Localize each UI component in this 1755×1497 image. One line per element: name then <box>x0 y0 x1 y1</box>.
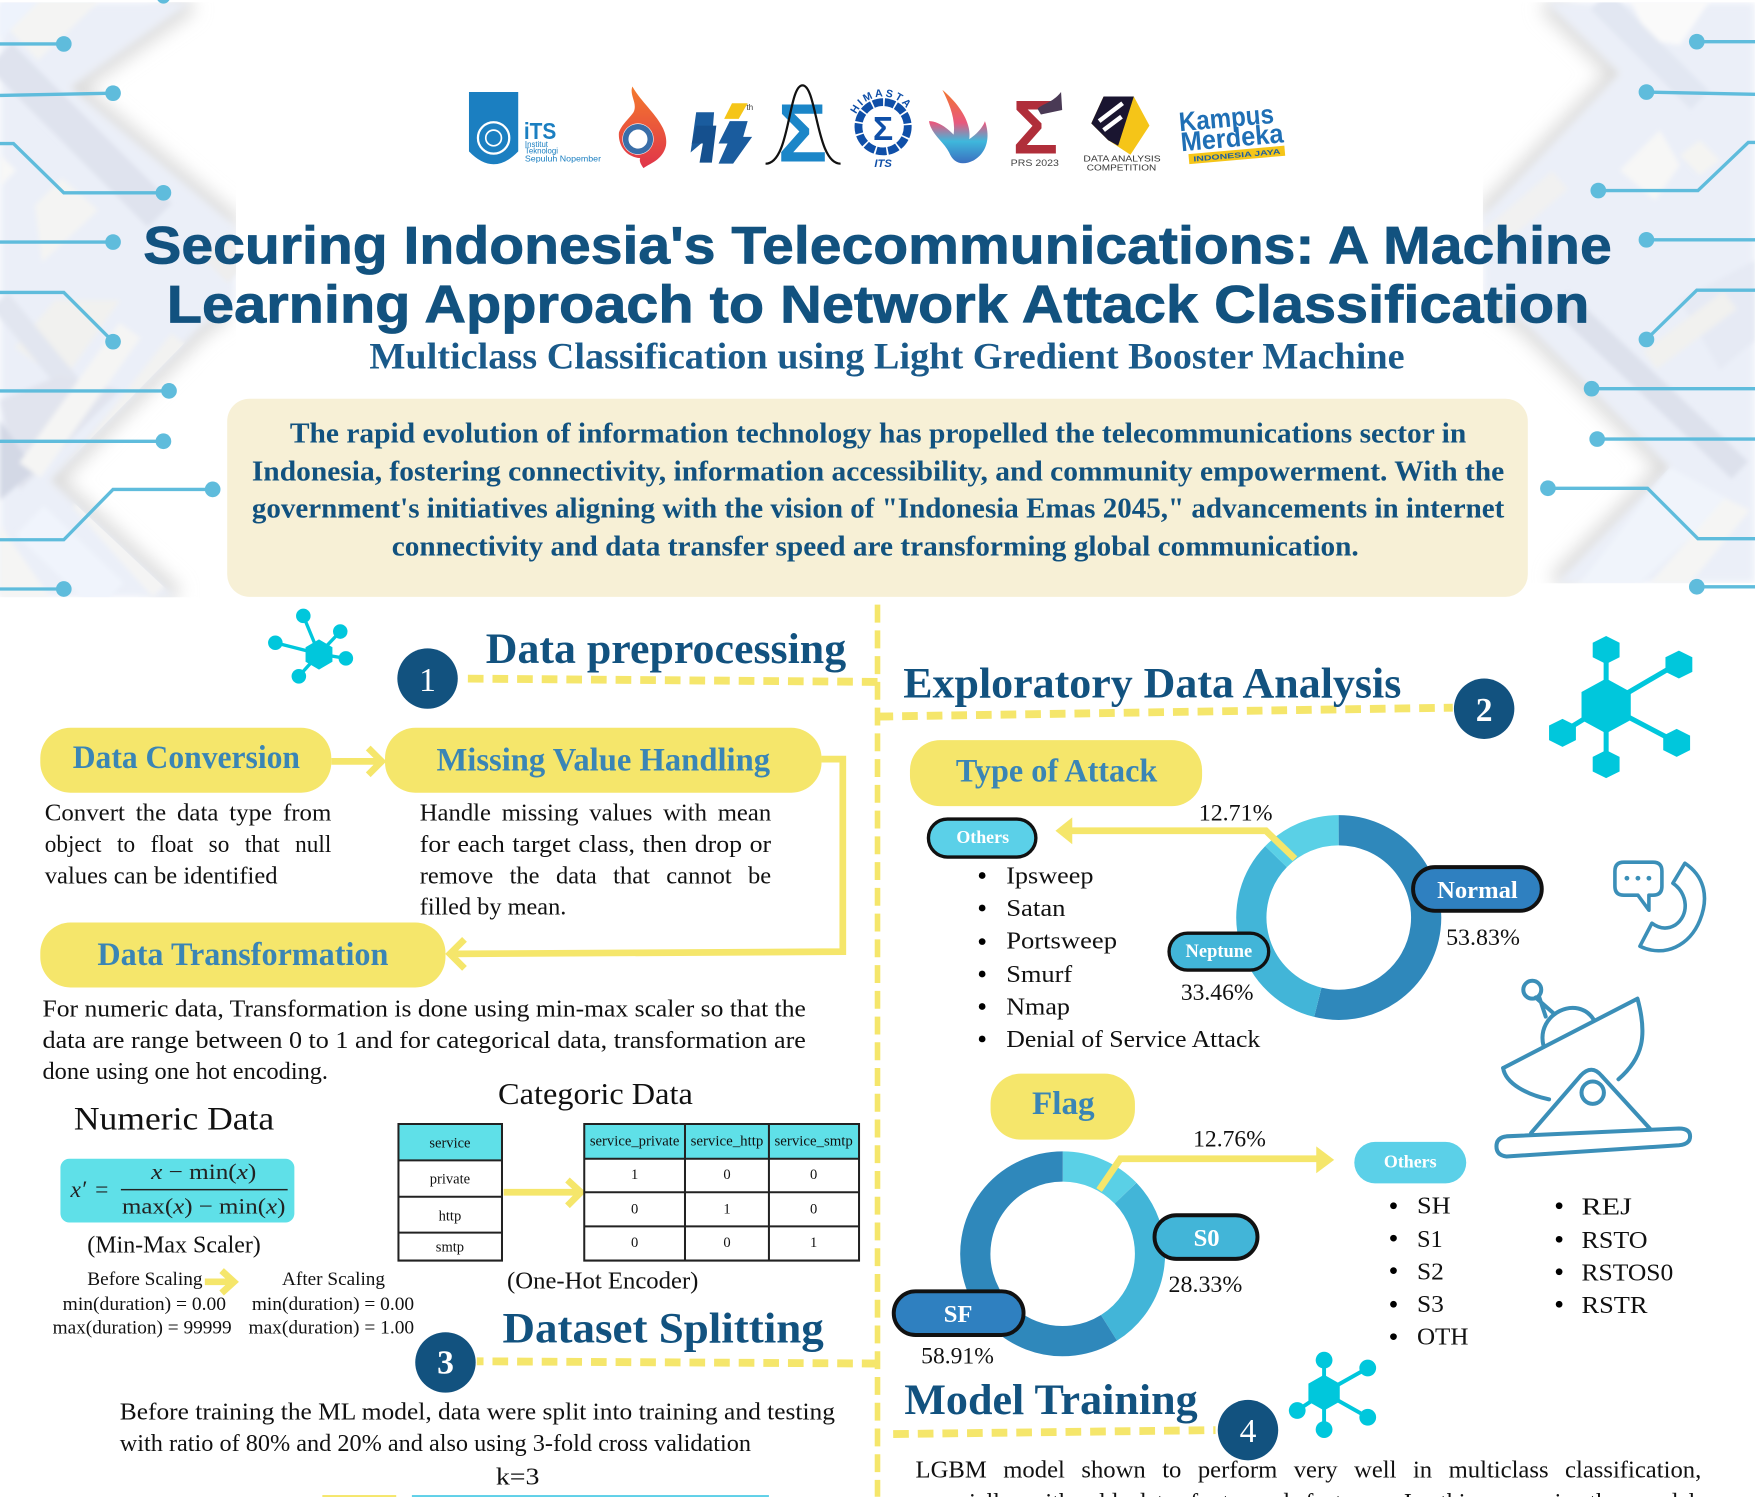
label: others attack: Others <box>956 827 1009 847</box>
value: others 12.71: 12.71% <box>1199 801 1273 827</box>
text: data transformation: data are range between 0 to 1 and for categorical data, transformation are <box>43 1028 806 1054</box>
list: attack types: Portsweep <box>1006 927 1117 954</box>
text: data transformation <box>43 997 806 1085</box>
intro panel <box>227 399 1528 597</box>
background: left chevron pattern <box>0 0 240 597</box>
list: flags column 2 <box>1556 1194 1673 1319</box>
arrow: before to after scaling <box>205 1271 234 1293</box>
arrow: conversion to missing value <box>331 748 382 775</box>
pill: missing value handling <box>385 728 822 793</box>
label: others flag <box>1354 1142 1466 1183</box>
value: SF 58.91: 58.91% <box>921 1344 994 1370</box>
icon: phone with speech bubble <box>1615 862 1704 951</box>
logo: ITS <box>469 92 601 164</box>
text: data conversion: Convert the data type from <box>45 801 332 827</box>
k-fold bars <box>322 1495 769 1497</box>
intro panel: The rapid evolution of information technology has propelled the telecommunications sector in <box>290 418 1466 449</box>
table: one-hot: service_smtp <box>775 1133 853 1149</box>
formula: min-max scaler: x′ <box>70 1177 87 1203</box>
text: dataset splitting: with ratio of 80% and 20% and also using 3-fold cross validation <box>120 1431 751 1457</box>
logo row <box>468 84 1286 179</box>
scaling example: min(duration) = 0.00 <box>63 1294 226 1315</box>
table: one-hot: 0 <box>810 1167 817 1183</box>
value: S0 28.33: 28.33% <box>1169 1272 1242 1298</box>
list: flags column 2: RSTO <box>1582 1227 1648 1254</box>
label: others attack <box>928 819 1036 857</box>
text: missing value handling <box>420 801 771 921</box>
label: normal <box>1413 867 1542 911</box>
text: data transformation: For numeric data, Transformation is done using min-max scaler so that the <box>43 997 806 1023</box>
scaling example: max(duration) = 1.00 <box>248 1317 414 1338</box>
pill: missing value handling: Missing Value Handling <box>437 742 770 778</box>
text: dataset splitting: Before training the ML model, data were split into training and testing <box>120 1399 835 1425</box>
table: service: smtp <box>436 1240 464 1256</box>
heading: section 2 exploratory data analysis <box>878 660 1514 739</box>
table: one-hot: 0 <box>810 1202 817 1218</box>
arrow: service to one-hot <box>504 1180 581 1206</box>
icon: satellite dish <box>1496 981 1690 1156</box>
scaling example: After Scaling <box>282 1269 386 1290</box>
heading: section 1 data preprocessing <box>397 625 878 709</box>
formula: min-max scaler: x − min( x) <box>150 1159 256 1184</box>
label: neptune <box>1169 933 1269 970</box>
logo: ITS: Sepuluh Nopember <box>525 154 601 163</box>
text: missing value handling: for each target class, then drop or <box>420 832 771 858</box>
heading: section 4 model training: 4 <box>1240 1413 1257 1450</box>
table: one-hot: service_private <box>590 1133 679 1149</box>
pill: flag: Flag <box>1032 1086 1095 1122</box>
table: one-hot: 1 <box>810 1235 817 1251</box>
icon: network small top-left <box>268 609 353 684</box>
table: service: http <box>439 1208 461 1224</box>
scaling example: max(duration) = 99999 <box>53 1317 232 1338</box>
logo: ITS: iTS <box>524 118 556 144</box>
icon: network large <box>1549 636 1692 778</box>
table: one-hot <box>584 1124 859 1261</box>
subtitle: Multiclass Classification using Light Gredient Booster Machine <box>369 336 1405 377</box>
text: data conversion: object to float so that null <box>45 832 332 858</box>
heading: section 4 model training: Model Training <box>904 1376 1198 1424</box>
logo: ITS: Teknologi <box>525 147 558 156</box>
intro panel: connectivity and data transfer speed are transforming global communication. <box>392 531 1359 562</box>
logo: Himasta: Σ <box>873 111 893 148</box>
logo: PRS sigma: Σ <box>1012 86 1058 171</box>
logo: sigma bell curve: Σ <box>778 86 827 179</box>
logo: 45th: th <box>747 103 753 112</box>
value: others 12.76: 12.76% <box>1193 1126 1266 1152</box>
table: service: private <box>430 1171 470 1187</box>
intro panel: Indonesia, fostering connectivity, information accessibility, and community empowerment. With the <box>252 456 1504 487</box>
pill: data transformation <box>40 923 445 987</box>
title: Securing Indonesia's Telecommunications: A Machine <box>143 216 1612 275</box>
label: S0: S0 <box>1194 1225 1220 1252</box>
list: attack types: Satan <box>1006 895 1066 922</box>
pill: type of attack <box>910 740 1202 806</box>
logo: Himasta <box>850 89 912 170</box>
logo: flame gear <box>619 86 666 168</box>
list: flags column 1: OTH <box>1417 1324 1469 1351</box>
background: right chevron pattern <box>1483 0 1755 583</box>
scaling example: Before Scaling <box>87 1269 203 1290</box>
intro panel: government's initiatives aligning with the vision of "Indonesia Emas 2045," advancements in internet <box>252 493 1505 524</box>
list: attack types: Ipsweep <box>1006 862 1094 889</box>
table: one-hot: 1 <box>631 1167 638 1183</box>
text: model training: LGBM model shown to perform very well in multiclass classification, <box>916 1458 1701 1484</box>
list: flags column 1: S1 <box>1417 1226 1443 1253</box>
circuit lines right <box>1540 34 1755 595</box>
formula: min-max scaler <box>60 1159 294 1223</box>
heading: section 3 dataset splitting: 3 <box>437 1345 454 1382</box>
value: normal 53.83: 53.83% <box>1446 925 1520 951</box>
logo: data analysis competition <box>1083 97 1161 172</box>
heading: section 2 exploratory data analysis: 2 <box>1476 692 1493 729</box>
text: missing value handling: remove the data that cannot be <box>420 863 771 889</box>
list: flags column 1 <box>1390 1193 1469 1351</box>
list: flags column 1: S2 <box>1417 1259 1444 1286</box>
logo: Kampus Merdeka: Kampus <box>1178 99 1275 137</box>
list: flags column 2: REJ <box>1582 1194 1632 1221</box>
value: neptune 33.46: 33.46% <box>1181 980 1254 1006</box>
text: missing value handling: filled by mean. <box>420 895 566 921</box>
pill: data conversion <box>40 728 331 793</box>
heading: categoric data: Categoric Data <box>498 1077 693 1111</box>
list: attack types: Denial of Service Attack <box>1006 1026 1261 1053</box>
list: flags column 1: SH <box>1417 1193 1451 1220</box>
list: flags column 2: RSTOS0 <box>1582 1260 1673 1287</box>
donut chart: flag <box>975 1167 1150 1341</box>
pill: flag <box>991 1074 1135 1140</box>
center dashed divider <box>875 605 880 1497</box>
label: SF <box>894 1291 1024 1335</box>
label: SF: SF <box>944 1301 972 1328</box>
title: Learning Approach to Network Attack Classification <box>167 276 1589 335</box>
heading: numeric data: Numeric Data <box>74 1102 274 1138</box>
logo: data analysis competition: COMPETITION <box>1087 162 1156 172</box>
logo: Kampus Merdeka: INDONESIA JAYA <box>1193 147 1282 163</box>
pill: data conversion: Data Conversion <box>73 740 300 776</box>
label: neptune: Neptune <box>1186 941 1252 961</box>
text: dataset splitting <box>120 1399 835 1490</box>
caption: one-hot encoder: (One-Hot Encoder) <box>507 1268 698 1295</box>
list: attack types: Smurf <box>1006 961 1073 988</box>
text: dataset splitting: k=3 <box>496 1464 539 1490</box>
text: model training <box>916 1458 1701 1497</box>
table: service <box>398 1124 502 1261</box>
title <box>143 216 1612 335</box>
heading: section 1 data preprocessing: Data preprocessing <box>486 625 846 673</box>
arrow: others attack <box>1055 817 1295 859</box>
table: one-hot: 0 <box>631 1235 638 1251</box>
label: normal: Normal <box>1437 877 1518 904</box>
pill: type of attack: Type of Attack <box>956 754 1157 790</box>
list: attack types <box>979 862 1261 1053</box>
heading: section 4 model training <box>893 1376 1278 1460</box>
logo: Kampus Merdeka: Merdeka <box>1179 118 1286 157</box>
list: attack types: Nmap <box>1006 993 1070 1020</box>
logo: Himasta: HIMASTA <box>850 89 910 114</box>
heading: section 3 dataset splitting: Dataset Splitting <box>503 1304 824 1352</box>
icon: network small bottom <box>1289 1352 1376 1438</box>
logo: PRS sigma: PRS 2023 <box>1011 158 1059 169</box>
arrow: others flag <box>1099 1146 1334 1190</box>
logo: Himasta: ITS <box>874 158 892 170</box>
heading: section 3 dataset splitting <box>415 1304 878 1393</box>
donut chart: type of attack <box>1251 830 1426 1005</box>
arrow: missing value to transformation <box>450 759 843 968</box>
list: flags column 1: S3 <box>1417 1291 1444 1318</box>
formula: min-max scaler: = <box>95 1177 108 1203</box>
logo: 45th <box>691 103 753 164</box>
list: flags column 2: RSTR <box>1582 1292 1648 1319</box>
scaling example: min(duration) = 0.00 <box>252 1294 414 1315</box>
table: one-hot: 1 <box>723 1202 731 1218</box>
circuit lines left <box>0 0 220 597</box>
label: others flag: Others <box>1384 1152 1437 1172</box>
table: one-hot: 0 <box>631 1202 638 1218</box>
logo: wave flame <box>929 90 988 163</box>
formula: min-max scaler: max( x) − min( x) <box>122 1194 285 1219</box>
logo: sigma bell curve <box>766 85 841 179</box>
table: one-hot: 0 <box>723 1167 731 1183</box>
text: data conversion: values can be identified <box>45 863 278 889</box>
logo: Kampus Merdeka <box>1178 98 1286 165</box>
text: missing value handling: Handle missing values with mean <box>420 801 771 827</box>
logo: ITS: Institut <box>525 140 549 149</box>
text: data transformation: done using one hot encoding. <box>43 1059 328 1085</box>
table: one-hot: 0 <box>723 1235 731 1251</box>
pill: data transformation: Data Transformation <box>97 937 388 973</box>
scaling example <box>53 1269 414 1338</box>
text: data conversion <box>45 801 332 889</box>
caption: min-max scaler: (Min-Max Scaler) <box>87 1232 261 1259</box>
label: S0 <box>1155 1215 1257 1259</box>
logo: data analysis competition: DATA ANALYSIS <box>1083 153 1161 163</box>
table: service: service <box>429 1136 471 1152</box>
heading: section 2 exploratory data analysis: Exploratory Data Analysis <box>903 660 1401 708</box>
table: one-hot: service_http <box>691 1133 763 1149</box>
heading: section 1 data preprocessing: 1 <box>419 662 436 699</box>
